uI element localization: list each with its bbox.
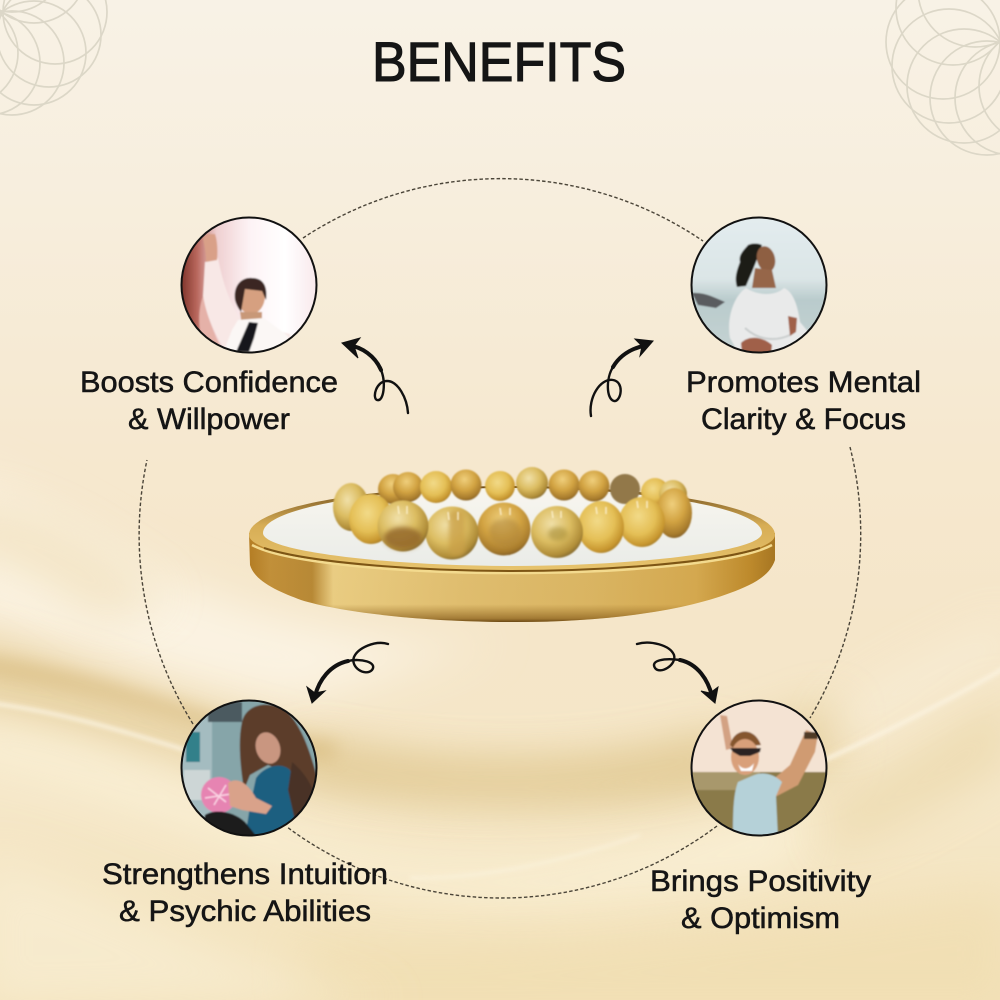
photo: man cheering bbox=[692, 702, 826, 834]
label: Promotes Mental bbox=[686, 366, 921, 399]
photo: man reaching up bbox=[180, 216, 320, 356]
panel: intuition benefit: & Psychic Abilities bbox=[119, 895, 371, 928]
panel: confidence benefit: & Willpower bbox=[128, 403, 290, 436]
plate: gold pedestal bbox=[249, 486, 775, 622]
panel: clarity benefit bbox=[686, 216, 921, 436]
photo ring bbox=[692, 218, 826, 352]
panel: confidence benefit bbox=[80, 216, 338, 436]
title: BENEFITS bbox=[372, 30, 626, 93]
panel: intuition benefit bbox=[102, 698, 388, 928]
arrow: to intuition bbox=[307, 643, 388, 703]
label: Strengthens Intuition bbox=[102, 858, 388, 891]
arrow: to confidence bbox=[342, 338, 408, 413]
panel: positivity benefit: & Optimism bbox=[681, 902, 840, 935]
photo ring bbox=[182, 700, 316, 836]
decoration: corner mandala left bbox=[0, 0, 107, 115]
photo ring bbox=[182, 218, 316, 352]
front row beads bbox=[333, 483, 692, 560]
back row beads bbox=[378, 467, 687, 508]
panel: clarity benefit: Clarity & Focus bbox=[701, 403, 906, 436]
photo: girl with plasma globe bbox=[180, 698, 320, 838]
decoration: corner mandala right bbox=[886, 0, 1000, 155]
dashed orbit circle bbox=[139, 179, 861, 898]
arrow: to clarity bbox=[591, 339, 653, 416]
label: Boosts Confidence bbox=[80, 366, 338, 399]
bead highlights bbox=[398, 501, 647, 520]
label: Brings Positivity bbox=[650, 865, 871, 898]
arrow: to positivity bbox=[637, 643, 718, 703]
bead tiger-eye bands bbox=[384, 510, 568, 556]
panel: positivity benefit bbox=[650, 698, 871, 935]
photo ring bbox=[692, 700, 826, 836]
bracelet: golden tiger eye beads bbox=[333, 467, 692, 560]
photo: woman by the sea bbox=[690, 216, 830, 356]
